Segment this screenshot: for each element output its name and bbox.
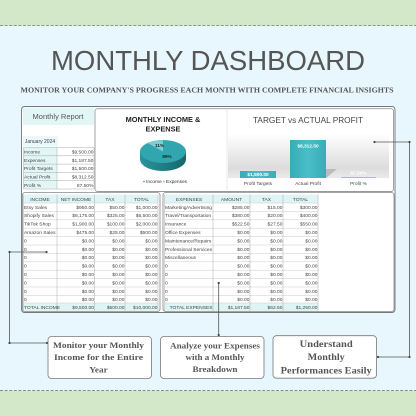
income table rows: $0.00 [82,255,94,261]
callout: monthly performances [273,336,376,378]
income table rows: $0.00 [145,272,158,278]
income table rows: $100.00 [107,222,125,228]
income table rows: 0 [24,272,27,278]
income table rows: $0.00 [82,297,94,303]
callout: expenses breakdown: with a Monthly [186,352,245,362]
income table rows: $1,900.00 [72,222,94,228]
expenses table rows: $0.00 [237,272,250,278]
title: MONTHLY DASHBOARD [51,45,365,76]
expenses table rows: $0.00 [237,238,250,244]
income table rows: $950.00 [76,205,94,211]
income table header: TAX [105,197,115,203]
income table rows: $0.00 [145,280,158,286]
month selector: January 2024 [25,139,55,145]
expenses table rows: $0.00 [237,297,250,303]
expenses table rows: 0 [165,264,168,270]
top green band [0,0,416,26]
bar: profit targets [240,171,276,178]
callout: monthly performances: Understand [300,339,353,349]
expenses table rows: $0.00 [237,264,250,270]
panel: expenses table [163,192,394,312]
pie labels [155,143,172,159]
expenses table rows: $0.00 [237,255,250,261]
expenses table header: TOTAL [293,197,308,203]
expenses table rows: Miscellaneous [165,255,197,261]
expenses table rows: $0.00 [270,264,283,270]
summary table: 87.50% [77,183,94,189]
expenses table rows: $285.00 [232,205,250,211]
panel: monthly report summary [23,108,94,189]
income table rows: 0 [24,247,27,253]
expenses table total row: $1,187.50 [228,305,250,311]
income table rows: $0.00 [145,247,158,253]
income table rows: Etsy Sales [24,205,48,211]
expenses table rows: $27.50 [268,222,283,228]
income table rows: $0.00 [145,238,158,244]
expenses table rows: $20.00 [268,213,283,219]
expenses table rows: $400.00 [300,213,318,219]
income table rows: $2,000.00 [136,222,158,228]
expenses table rows: $0.00 [270,289,283,295]
expenses table rows: $0.00 [270,230,283,236]
expenses table rows: $0.00 [270,272,283,278]
panel: dashboard frame [22,106,395,312]
expenses table rows: $0.00 [305,280,318,286]
expenses table rows: Professional Services [165,247,213,253]
expenses table rows: $0.00 [270,238,283,244]
income table header [24,194,158,203]
expenses table rows: $0.00 [305,264,318,270]
summary table [24,148,94,189]
income table rows [24,205,158,303]
summary table: Expenses [24,158,46,164]
income table rows: $0.00 [112,280,125,286]
callout: expenses breakdown: Analyze your Expenses [170,340,261,350]
expenses table rows: $522.50 [232,222,250,228]
income table rows: $0.00 [145,297,158,303]
pie legend [143,179,188,185]
bar labels [244,181,368,187]
income table total row fill [24,303,158,311]
summary table: $1,187.50 [72,158,94,164]
income table rows: $0.00 [112,247,125,253]
income table rows: $475.00 [76,230,94,236]
summary table: $1,500.00 [72,166,94,172]
expenses table total row: $62.50 [268,305,283,311]
summary table: Actual Profit [24,174,51,180]
expenses table rows: $0.00 [305,230,318,236]
chart title: TARGET vs ACTUAL PROFIT [253,115,364,125]
expenses table header: TAX [262,197,272,203]
income table total row: TOTAL INCOME [24,305,61,311]
expenses table rows: $0.00 [237,289,250,295]
pie legend: Expenses [166,179,188,185]
summary table: $9,500.00 [72,150,94,156]
expenses table rows: $0.00 [237,280,250,286]
income table rows: $0.00 [112,264,125,270]
income table rows: $0.00 [112,238,125,244]
income table total row [24,305,158,311]
expenses table rows: $0.00 [237,247,250,253]
expenses table rows: Marketing/Advertising [165,205,212,211]
income table rows: $0.00 [145,264,158,270]
callout: monthly income [48,336,152,378]
expenses table total row: $1,250.00 [296,305,318,311]
expenses table header: AMOUNT [221,197,242,203]
income table rows: $6,175.00 [72,213,94,219]
income table rows: $0.00 [82,247,94,253]
summary table: Income [24,150,40,156]
expenses table rows: $0.00 [270,255,283,261]
expenses table rows: $0.00 [305,272,318,278]
income table total row: $9,500.00 [72,305,94,311]
income table rows: 0 [24,255,27,261]
income table rows: Shopify Sales [24,213,54,219]
expenses table rows: $0.00 [305,297,318,303]
pie labels: 89% [162,154,172,159]
bar: profit percent [341,170,376,178]
expenses table total row fill [164,303,318,311]
income table rows: 0 [24,289,27,295]
expenses table rows: 0 [165,297,168,303]
expenses table header: EXPENSES [176,197,203,203]
bar: profit percent: 87.50% [350,170,367,176]
expenses table rows [165,205,318,303]
income table rows: $0.00 [112,255,125,261]
income table rows: $0.00 [82,238,94,244]
income table rows: $0.00 [112,297,125,303]
subtitle: MONITOR YOUR COMPANY'S PROGRESS EACH MONTH WITH COMPLETE FINANCIAL INSIGHTS [20,86,393,95]
expenses table rows: Office Expenses [165,230,201,236]
expenses table rows: 0 [165,280,168,286]
panel: charts container [95,109,394,192]
income table rows: $0.00 [82,264,94,270]
income table rows: $0.00 [145,289,158,295]
income table rows: $0.00 [145,255,158,261]
income table rows: $0.00 [82,289,94,295]
expenses table rows: Maintenance/Repairs [165,238,212,244]
income table rows: 0 [24,264,27,270]
callout: monthly income: Income for the Entire [54,352,143,362]
income table total row: $10,000.00 [133,305,158,311]
income table rows: TikTok Shop [24,222,51,228]
expenses table rows: Insurance [165,222,187,228]
pie labels: 11% [155,143,164,148]
income table rows: $50.00 [110,205,125,211]
summary table: Profit % [24,183,42,189]
income table rows: $0.00 [112,272,125,278]
expenses table rows: $0.00 [270,280,283,286]
expenses table rows: $0.00 [270,247,283,253]
chart: monthly income and expense pie [126,115,201,185]
panel: income table [22,192,160,312]
pie slice: income [140,140,186,163]
bar labels: Profit Targets [244,181,273,187]
expenses table rows: $0.00 [305,255,318,261]
income table rows: $0.00 [82,272,94,278]
callout: monthly income: Year [89,364,108,374]
callout: monthly income: Monitor your Monthly [53,340,145,350]
callout: monthly performances: Performances Easily [281,366,372,376]
expenses table rows: $0.00 [305,238,318,244]
expenses table rows: $15.00 [268,205,283,211]
income table rows: $500.00 [140,230,158,236]
chart: target vs actual profit [228,115,389,187]
bar labels: Actual Profit [295,181,322,187]
expenses table header [164,194,318,203]
expenses table rows: $380.00 [232,213,250,219]
income table rows: $0.00 [112,289,125,295]
arrow: profit chart to callout [373,141,411,358]
income table header: TOTAL [134,197,149,203]
heading: monthly report: Monthly Report [32,114,84,121]
expenses table rows: $0.00 [270,297,283,303]
income table rows: Amazon Sales [24,230,56,236]
expenses table rows: 0 [165,272,168,278]
bottom green band [0,391,416,416]
pie legend: Income [146,179,162,185]
income table rows: $1,000.00 [136,205,158,211]
income table rows: $0.00 [82,280,94,286]
arrow: expenses table to callout [218,282,220,336]
bar: actual profit [290,140,337,178]
income table rows: $6,500.00 [136,213,158,219]
bar labels: Profit % [350,181,368,187]
income table total row: $500.00 [107,305,125,311]
expenses table rows: $300.00 [300,205,318,211]
summary table: Profit Targets [24,166,53,172]
expenses table rows: Travel/Transportation [165,213,211,219]
chart background band [228,134,389,178]
income table rows: 0 [24,238,27,244]
bar: profit targets: $1,500.00 [247,172,269,178]
expenses table rows: $0.00 [237,230,250,236]
income table header: NET INCOME [61,197,92,203]
chart title: EXPENSE [146,125,181,134]
summary table: $8,312.50 [72,174,94,180]
income table rows: $325.00 [107,213,125,219]
expenses table total row: TOTAL EXPENSES [170,305,213,311]
income table rows: 0 [24,297,27,303]
bar: actual profit: $8,312.50 [297,144,319,150]
callout: monthly performances: Monthly [308,352,345,362]
callout: expenses breakdown [160,336,264,378]
pie side [140,152,186,171]
income table rows: $25.00 [110,230,125,236]
expenses table total row [170,305,318,311]
expenses table rows: $0.00 [305,247,318,253]
callout: expenses breakdown: Breakdown [192,364,238,374]
pie slice: expenses [148,140,163,152]
expenses table rows: $0.00 [305,289,318,295]
income table header: INCOME [30,197,51,203]
expenses table rows: $550.00 [300,222,318,228]
arrow: income table to callout [8,251,48,344]
chart title: MONTHLY INCOME & [126,115,200,124]
income table rows: 0 [24,280,27,286]
expenses table rows: 0 [165,289,168,295]
